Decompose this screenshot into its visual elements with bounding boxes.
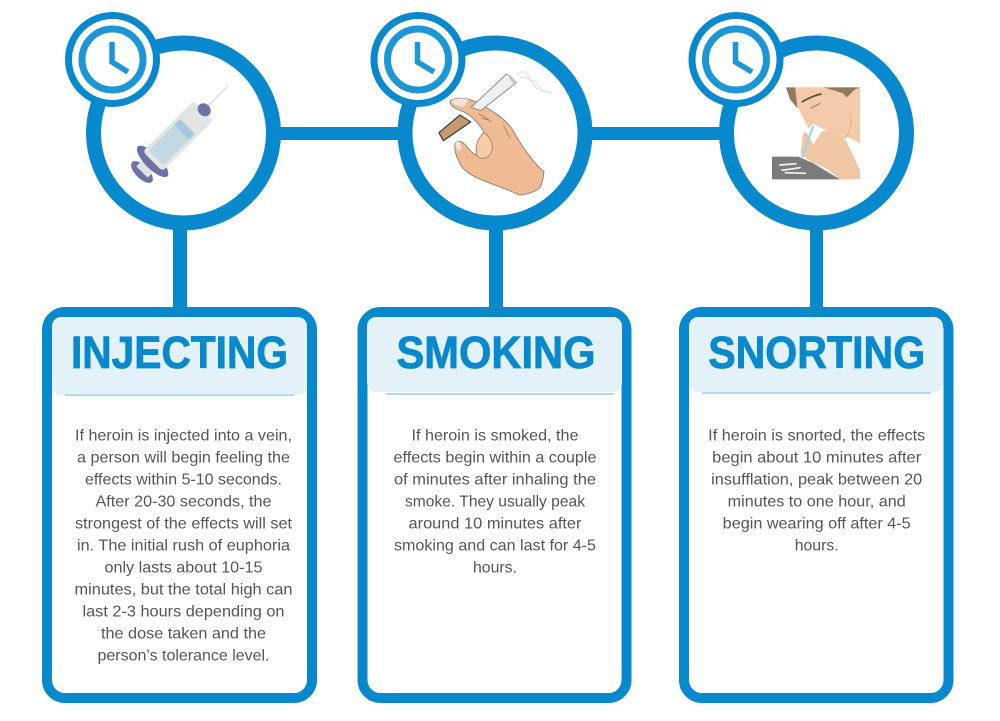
body text: smoking: smoking and can last for 4-5 — [394, 538, 596, 554]
body text: injecting: effects within 5-10 seconds. — [85, 472, 282, 488]
body text: snorting: minutes to one hour, and — [728, 494, 906, 510]
connector: smoking circle to panel — [489, 225, 503, 313]
body text: snorting: If heroin is snorted, the effects — [708, 428, 925, 444]
icon: person snorting powder — [772, 87, 860, 179]
rule under heading — [65, 394, 294, 396]
clock icon: snorting — [692, 16, 780, 104]
body text: injecting — [74, 428, 293, 664]
body text: smoking: around 10 minutes after — [408, 516, 582, 532]
body text: injecting: person’s tolerance level. — [98, 648, 270, 664]
body text: injecting: After 20-30 seconds, the — [96, 494, 272, 510]
body text: injecting: If heroin is injected into a vein, — [75, 428, 292, 444]
body text: snorting: hours. — [795, 538, 839, 554]
circle: smoking — [405, 43, 585, 223]
panel: injecting — [47, 312, 312, 698]
clock icon: injecting — [68, 16, 156, 104]
body text: smoking: If heroin is smoked, the — [412, 428, 579, 444]
body text: injecting: last 2-3 hours depending on — [82, 604, 284, 620]
heading: smoking: SMOKING — [396, 327, 596, 378]
body text: injecting: only lasts about 10-15 — [104, 560, 263, 576]
body text: injecting: the dose taken and the — [101, 626, 266, 642]
icon: hand holding cigarette — [439, 72, 552, 195]
body text: snorting: begin about 10 minutes after — [712, 450, 922, 466]
circle: snorting — [726, 43, 906, 223]
connector: snorting circle to panel — [810, 225, 823, 313]
body text: snorting: begin wearing off after 4-5 — [723, 516, 911, 532]
panel: snorting — [684, 312, 948, 698]
icon: syringe — [123, 71, 243, 191]
body text: smoking: of minutes after inhaling the — [394, 472, 596, 488]
circle: injecting — [94, 43, 274, 223]
connector: injecting circle to panel — [173, 225, 187, 313]
body text: injecting: in. The initial rush of euphoria — [77, 538, 290, 554]
header band: injecting — [52, 317, 307, 395]
header band: snorting — [689, 317, 943, 392]
rule under heading — [386, 393, 614, 395]
body text: injecting: a person will begin feeling the — [77, 450, 290, 466]
body text: injecting: minutes, but the total high can — [74, 582, 292, 598]
body text: snorting: insufflation, peak between 20 — [711, 472, 922, 488]
heading: snorting: SNORTING — [708, 327, 925, 378]
heading: injecting: INJECTING — [71, 327, 288, 378]
body text: smoking: smoke. They usually peak — [405, 494, 586, 510]
body text: snorting — [708, 428, 925, 554]
body text: injecting: strongest of the effects will set — [75, 516, 293, 532]
header band: smoking — [367, 317, 622, 392]
body text: smoking: hours. — [473, 560, 517, 576]
rule under heading — [702, 392, 931, 394]
panel: smoking — [362, 312, 626, 698]
body text: smoking — [394, 428, 597, 576]
timeline connector: horizontal links between circles — [275, 127, 725, 140]
body text: smoking: effects begin within a couple — [394, 450, 597, 466]
clock icon: smoking — [374, 16, 462, 104]
